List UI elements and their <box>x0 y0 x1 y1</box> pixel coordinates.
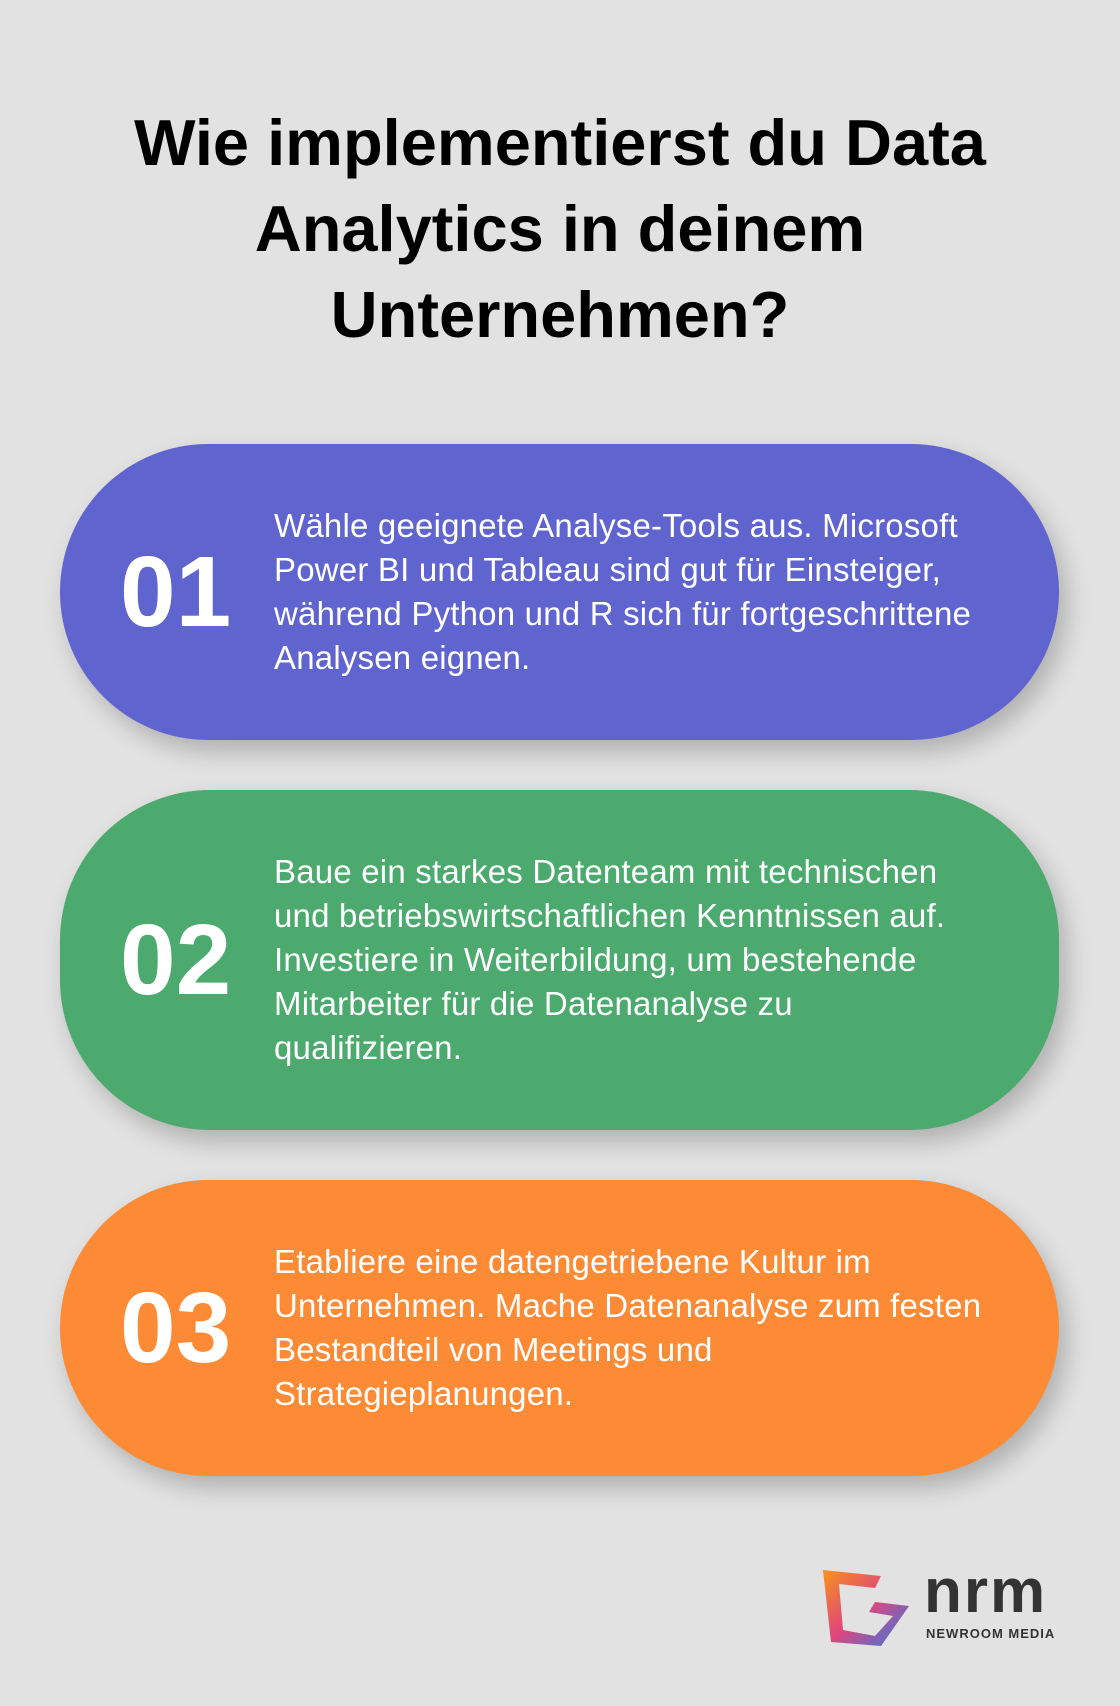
text step 01: während Python und R sich für fortgeschrittene <box>274 595 971 632</box>
logo: newroom media <box>823 1557 1055 1646</box>
text step 02: und betriebswirtschaftlichen Kenntnissen auf. <box>274 897 945 934</box>
text step 03: Strategieplanungen. <box>274 1375 573 1412</box>
text step 01 <box>274 507 971 676</box>
panel: step 02 <box>60 790 1059 1130</box>
title: Wie implementierst du Data <box>134 106 986 179</box>
title: Unternehmen? <box>331 278 789 351</box>
text step 02: qualifizieren. <box>274 1029 462 1066</box>
text step 02: Baue ein starkes Datenteam mit technischen <box>274 853 937 890</box>
text step 03 <box>274 1243 981 1412</box>
title <box>134 106 986 351</box>
title: Analytics in deinem <box>255 192 865 265</box>
text step 01: Analysen eignen. <box>274 639 530 676</box>
text step 02 <box>274 853 945 1066</box>
text step 03: Bestandteil von Meetings und <box>274 1331 713 1368</box>
text step 02: Mitarbeiter für die Datenanalyse zu <box>274 985 793 1022</box>
text step 01: Wähle geeignete Analyse-Tools aus. Microsoft <box>274 507 958 544</box>
logo: newroom media: NEWROOM MEDIA <box>926 1626 1055 1641</box>
logo text: nrm <box>924 1557 1047 1626</box>
icon: logo mark <box>823 1570 909 1646</box>
text step 02: Investiere in Weiterbildung, um bestehende <box>274 941 917 978</box>
text step 01: Power BI und Tableau sind gut für Einsteiger, <box>274 551 941 588</box>
number 01: 01 <box>120 536 231 648</box>
text step 03: Unternehmen. Mache Datenanalyse zum festen <box>274 1287 981 1324</box>
number 03: 03 <box>120 1272 231 1384</box>
panel: step 01 <box>60 444 1059 740</box>
number 02: 02 <box>120 904 231 1016</box>
text step 03: Etabliere eine datengetriebene Kultur im <box>274 1243 871 1280</box>
panel: step 03 <box>60 1180 1059 1476</box>
